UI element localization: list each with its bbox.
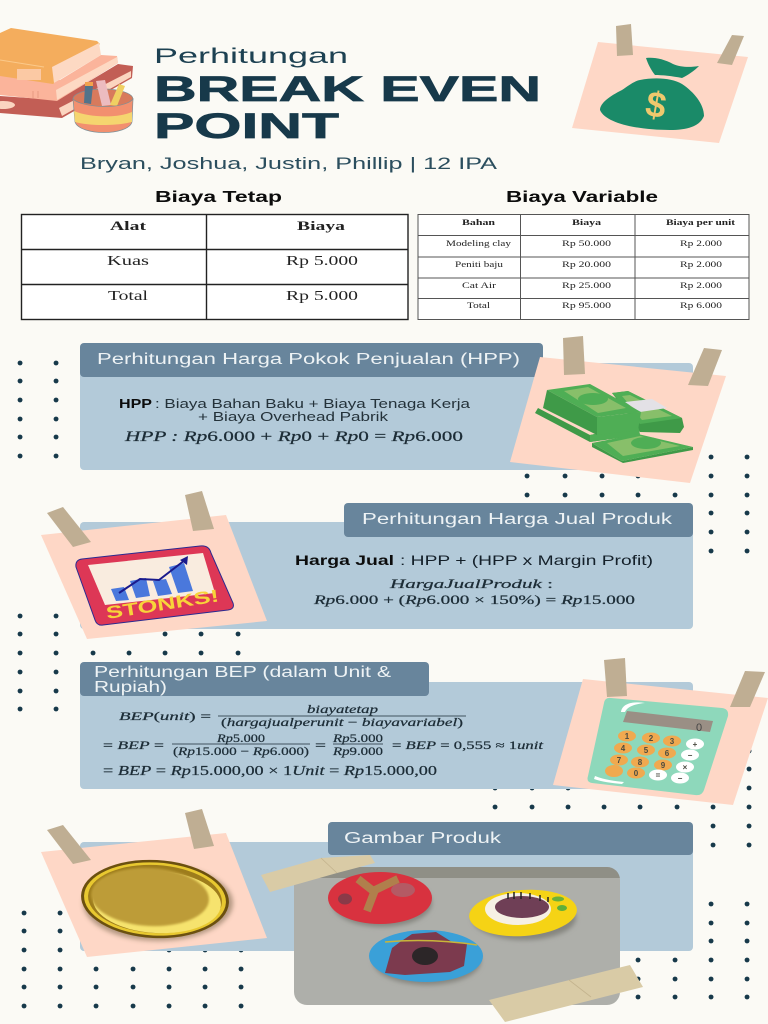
text: Harga Jual definition: Harga Jual (295, 552, 394, 568)
formula: BEP calculation: Rp 5.000 (332, 733, 383, 745)
table: Biaya Tetap: Rp 5.000 (286, 289, 358, 304)
table: Biaya Variable: Biaya per unit (666, 217, 735, 227)
title: Perhitungan: Perhitungan (154, 44, 348, 68)
text: HPP definition: HPP (119, 397, 152, 411)
panel header: Harga Jual: Perhitungan Harga Jual Produk (362, 511, 672, 528)
icon: calculator note: 4 (621, 744, 626, 753)
panel header: Gambar Produk: Gambar Produk (344, 830, 501, 847)
icon: stack of books with pencil cup (0, 28, 133, 132)
icon: stonks note (41, 491, 267, 639)
icon: calculator note: 2 (649, 734, 654, 743)
formula: BEP unit: biayatetap (307, 704, 378, 716)
table: Biaya Variable: Rp 50.000 (562, 238, 611, 248)
table: Biaya Variable: Bahan (462, 217, 495, 227)
text: Harga Jual definition: : HPP + (HPP x Margin Profit) (400, 552, 653, 568)
table: Biaya Variable: Rp 25.000 (562, 280, 611, 290)
panel header: Harga Jual (344, 503, 693, 537)
table: Biaya Variable: Total (467, 300, 491, 310)
icon: calculator note: 8 (638, 758, 643, 767)
formula: BEP calculation: Rp 5.000 (216, 733, 265, 745)
table: Biaya Variable: Rp 2.000 (680, 238, 722, 248)
panel: Harga Jual (80, 503, 693, 629)
formula: HPP: HPP : Rp 6.000 + Rp 0 + Rp 0 = Rp 6.000 (124, 429, 463, 445)
table: Biaya Variable (418, 214, 749, 320)
icon: calculator note: 9 (661, 761, 666, 770)
icon: money bag note (572, 24, 748, 143)
panel: HPP (80, 343, 693, 470)
icon: calculator note: − (678, 774, 683, 783)
table: Biaya Variable: Rp 95.000 (562, 300, 611, 310)
text: HPP definition: : Biaya Bahan Baku + Biaya Tenaga Kerja (155, 397, 470, 411)
icon: calculator note: 5 (644, 746, 649, 755)
icon: gold plate note (41, 809, 267, 957)
panel header: HPP (80, 343, 543, 377)
icon: calculator note: = (656, 771, 661, 780)
table: Biaya Tetap: Kuas (107, 254, 149, 269)
icon: calculator note: − (688, 751, 693, 760)
formula: Harga Jual: HargaJualProduk : (388, 576, 553, 591)
tape: photo bottom right (489, 965, 643, 1022)
yellow stone (468, 886, 578, 940)
table: Biaya Variable: Cat Air (462, 280, 496, 290)
table: Biaya Tetap: Biaya (297, 218, 346, 233)
icon: calculator note: 0 (696, 722, 702, 734)
table: Biaya Tetap (21, 214, 408, 320)
icon: money bag note: $ (643, 83, 670, 126)
formula: BEP calculation: = BEP = 0,555 ≈ 1 unit (392, 740, 544, 752)
photo: painted clay products (294, 867, 620, 1005)
formula: BEP calculation: = (315, 740, 326, 752)
heading: Biaya Tetap: Biaya Tetap (155, 189, 282, 206)
icon: calculator note: × (683, 763, 688, 772)
formula: BEP calculation: (Rp 15.000 − Rp 6.000) (173, 746, 309, 758)
icon: calculator note: + (693, 740, 698, 749)
table: Biaya Variable: Rp 2.000 (680, 280, 722, 290)
formula: BEP calculation (103, 733, 544, 758)
blue stone (369, 930, 483, 985)
title: BREAK EVEN: BREAK EVEN (154, 69, 541, 109)
icon: calculator note: 1 (625, 732, 630, 741)
formula: Harga Jual: Rp 6.000 + ( Rp 6.000 × 150%) = Rp 15.000 (313, 592, 635, 607)
icon: stonks note: STONKS! (104, 585, 220, 623)
icon: calculator note: 3 (670, 737, 675, 746)
text: HPP definition (119, 397, 470, 424)
panel: Gambar Produk (80, 822, 693, 951)
red stone (328, 872, 432, 927)
icon: calculator note: 7 (617, 756, 622, 765)
panel header: BEP: Rupiah) (94, 679, 167, 696)
formula: BEP unit (119, 704, 466, 729)
tape: photo top left (261, 855, 375, 892)
panel: BEP (80, 662, 693, 789)
formula: BEP calculation: Rp 9.000 (332, 746, 383, 758)
back stack (612, 391, 684, 433)
heading: Biaya Variable: Biaya Variable (506, 189, 659, 206)
panel header: BEP: Perhitungan BEP (dalam Unit & (94, 664, 392, 681)
formula: BEP unit: BEP (unit ) = (119, 711, 211, 723)
title: POINT: POINT (154, 106, 340, 146)
table: Biaya Tetap: Alat (110, 218, 147, 233)
icon: cash note (510, 336, 726, 483)
icon: calculator note (553, 658, 768, 805)
panel header: BEP (80, 662, 429, 696)
formula: BEP rupiah: = BEP = Rp 15.000,00 × 1 Unit = Rp 15.000,00 (103, 763, 437, 778)
formula: BEP calculation: = BEP = (103, 740, 164, 752)
table: Biaya Variable: Rp 2.000 (680, 259, 722, 269)
front bill (592, 434, 693, 463)
table: Biaya Variable: Rp 20.000 (562, 259, 611, 269)
formula: Harga Jual (313, 576, 635, 607)
formula: BEP unit: (hargajualperunit − biayavariabel ) (221, 717, 463, 729)
table: Biaya Variable: Rp 6.000 (680, 300, 722, 310)
panel header: Gambar Produk (328, 822, 693, 855)
panel header: HPP: Perhitungan Harga Pokok Penjualan (HPP) (97, 351, 520, 368)
icon: calculator note: 6 (665, 749, 670, 758)
main stack (535, 384, 641, 442)
table: Biaya Variable: Peniti baju (455, 259, 504, 269)
table: Biaya Variable: Modeling clay (446, 238, 512, 248)
subtitle: authors: Bryan, Joshua, Justin, Phillip | 12 IPA (80, 155, 497, 173)
text: HPP definition: + Biaya Overhead Pabrik (198, 410, 389, 424)
table: Biaya Tetap: Total (108, 289, 148, 304)
table: Biaya Tetap: Rp 5.000 (286, 254, 358, 269)
text: Harga Jual definition (295, 552, 653, 568)
icon: calculator note: 0 (634, 769, 639, 778)
table: Biaya Variable: Biaya (572, 217, 602, 227)
